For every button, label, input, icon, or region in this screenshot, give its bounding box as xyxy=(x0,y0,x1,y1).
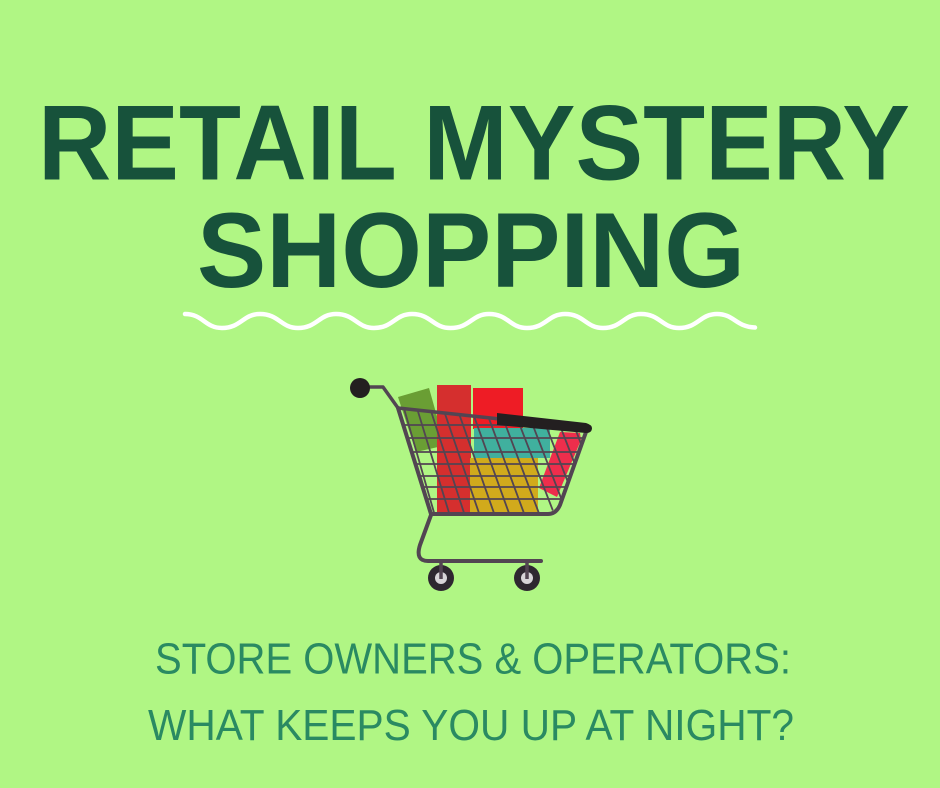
infographic canvas xyxy=(44,105,908,740)
title: SHOPPING xyxy=(197,190,745,310)
wavy underline xyxy=(185,314,755,328)
cart wire mesh xyxy=(404,410,582,512)
cart frame xyxy=(370,387,586,561)
subtitle: STORE OWNERS & OPERATORS: xyxy=(155,634,791,684)
cart items xyxy=(398,385,581,512)
wheels xyxy=(428,561,540,591)
subtitle: WHAT KEEPS YOU UP AT NIGHT? xyxy=(148,701,794,750)
title: RETAIL MYSTERY xyxy=(38,82,910,202)
icon: shopping cart xyxy=(350,378,609,591)
title xyxy=(38,82,910,310)
subtitle xyxy=(148,634,794,750)
cart handle xyxy=(497,413,592,433)
